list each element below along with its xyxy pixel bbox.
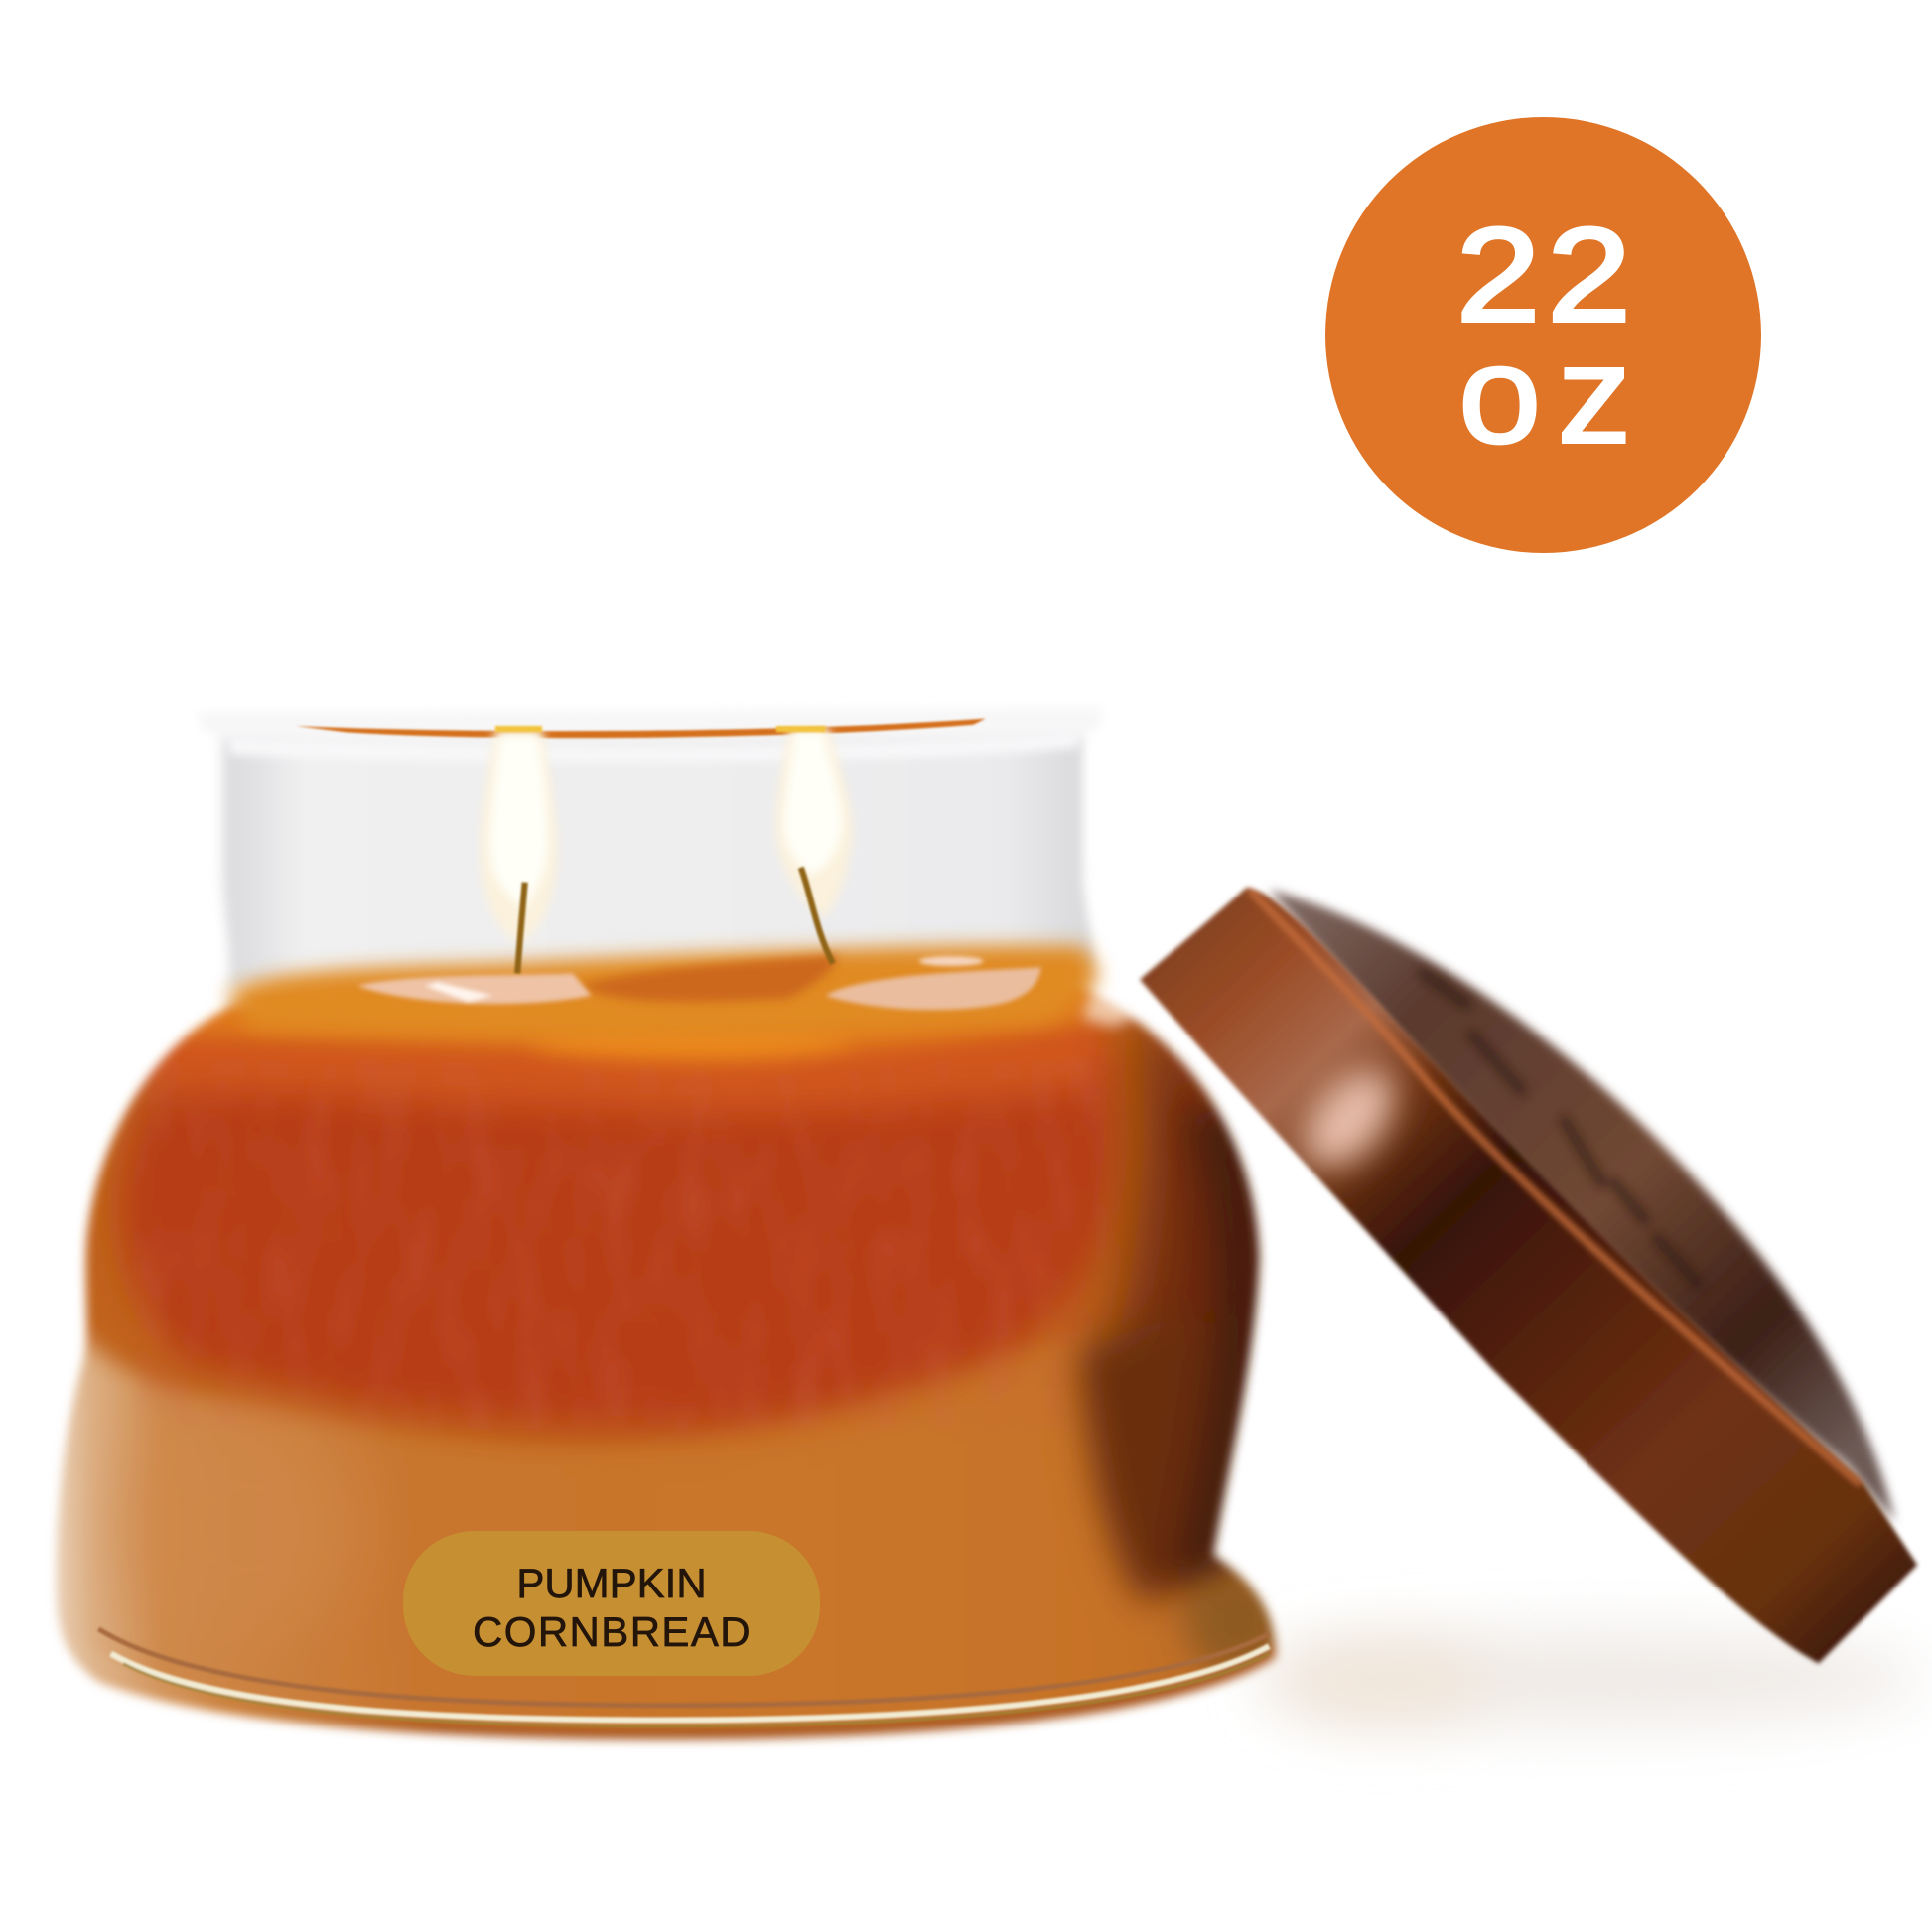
right dark edge bbox=[1201, 1109, 1244, 1584]
flame: right bbox=[776, 726, 853, 918]
lid top face bbox=[1269, 890, 1895, 1522]
label: pumpkin cornbread bbox=[403, 1531, 820, 1676]
shoulder glow bbox=[189, 994, 1093, 1059]
upper wax: orange edge bbox=[77, 1021, 1260, 1445]
jar body and wax bbox=[50, 967, 1294, 1749]
under-foot amber bbox=[85, 1651, 1277, 1745]
melted wax pool bbox=[228, 945, 1099, 1037]
wax line seen through rim bbox=[296, 719, 986, 738]
wick: right bbox=[801, 868, 833, 964]
candle product photo bbox=[50, 707, 1932, 1749]
ground shadow bbox=[1257, 1631, 1922, 1725]
label: pumpkin cornbread: PUMPKIN bbox=[516, 1560, 707, 1606]
right dark side: upper bbox=[1103, 1004, 1294, 1380]
glass neck bbox=[198, 707, 1103, 1023]
size badge: 22 oz: 2 bbox=[1456, 202, 1540, 349]
size badge: 22 oz bbox=[1325, 117, 1761, 553]
peach glass at right shoulder bbox=[1084, 980, 1140, 1026]
upper wax: red core bbox=[119, 1047, 1116, 1428]
copper lid bbox=[1137, 884, 1920, 1666]
wick: left bbox=[517, 883, 525, 973]
lid rim band bbox=[1137, 884, 1920, 1666]
flame: left bbox=[481, 726, 557, 942]
lighter top of the core bbox=[148, 1011, 1109, 1112]
glass foot rim bbox=[98, 1629, 1269, 1726]
size badge: 22 oz: 2 bbox=[1548, 202, 1631, 349]
lower left light bbox=[121, 1495, 327, 1561]
foot base bbox=[1184, 1569, 1293, 1672]
embossed marks bbox=[1423, 973, 1698, 1284]
right dark side: lower bbox=[1082, 1318, 1269, 1601]
size badge: 22 oz: o bbox=[1458, 317, 1541, 472]
size badge: 22 oz: z bbox=[1558, 317, 1631, 472]
candle jar bbox=[50, 707, 1294, 1749]
mottled texture bbox=[136, 1059, 1109, 1430]
label: pumpkin cornbread: CORNBREAD bbox=[473, 1608, 752, 1655]
